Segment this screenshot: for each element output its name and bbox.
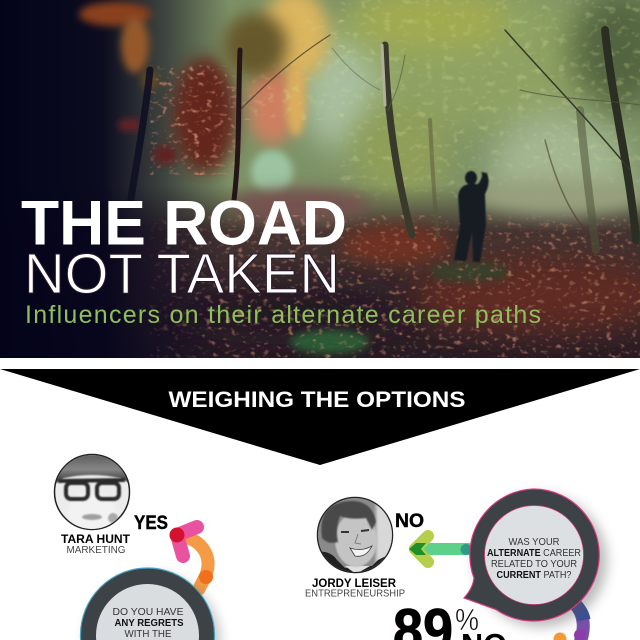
dark left forest xyxy=(0,0,230,358)
question bubble: regrets: ANY REGRETS xyxy=(114,617,184,629)
tree trunks xyxy=(130,30,640,250)
portrait: Tara Hunt xyxy=(54,454,130,532)
label: Tara Hunt, marketing: MARKETING xyxy=(66,544,126,556)
arrow: green to no xyxy=(409,536,472,562)
title: NOT TAKEN xyxy=(24,242,340,306)
question bubble: alternate career: CURRENT PATH? xyxy=(496,570,572,581)
question bubble: alternate career: ALTERNATE CAREER xyxy=(487,548,581,559)
question bubble: alternate career xyxy=(464,489,607,627)
title xyxy=(21,188,347,306)
section banner: weighing the options: WEIGHING THE OPTIONS xyxy=(168,387,466,412)
subtitle: Influencers on their alternate career paths xyxy=(25,301,541,329)
label: Tara Hunt, marketing xyxy=(61,532,131,556)
answer: no: NO xyxy=(395,511,424,532)
label: Jordy Leiser, entrepreneurship xyxy=(305,576,405,600)
portrait: Jordy Leiser xyxy=(316,497,394,575)
section banner: weighing the options xyxy=(0,369,640,465)
question bubble: alternate career: RELATED TO YOUR xyxy=(491,559,577,570)
title: THE ROAD xyxy=(21,188,347,258)
label: Tara Hunt, marketing: TARA HUNT xyxy=(61,532,131,546)
question bubble: regrets: WITH THE xyxy=(124,628,172,640)
person silhouette xyxy=(454,171,489,262)
arc: purple connector xyxy=(554,604,586,640)
background photo: misty forest path xyxy=(0,0,640,370)
statistic: 89% no xyxy=(394,608,505,640)
question bubble: alternate career: WAS YOUR xyxy=(508,537,560,548)
ground xyxy=(106,188,640,358)
label: Jordy Leiser, entrepreneurship: JORDY LEISER xyxy=(312,576,396,590)
arrow: orange to yes xyxy=(170,527,213,589)
question bubble: regrets xyxy=(80,568,220,640)
statistic: 89% no: % xyxy=(455,602,479,637)
question bubble: regrets: DO YOU HAVE xyxy=(112,606,184,618)
label: Jordy Leiser, entrepreneurship: ENTREPRENEURSHIP xyxy=(305,588,405,600)
answer: yes: YES xyxy=(134,513,168,534)
